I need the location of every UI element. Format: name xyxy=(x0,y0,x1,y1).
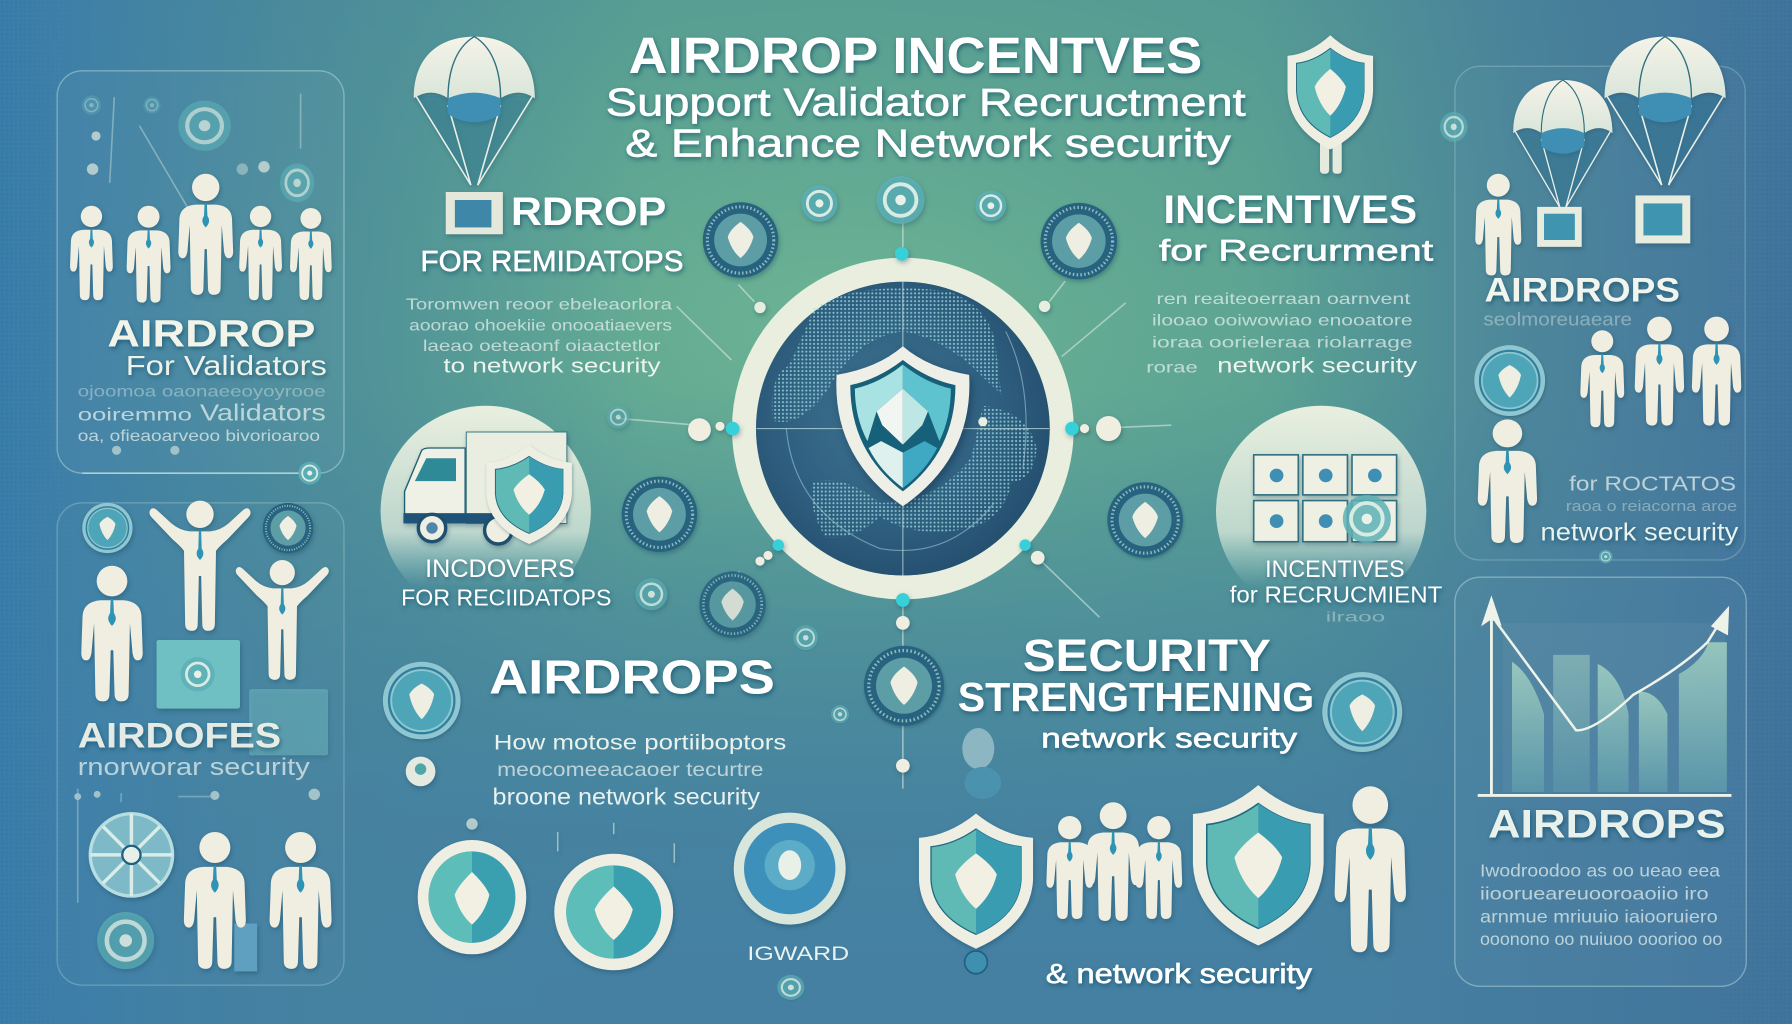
icon: shield badges xyxy=(418,818,674,970)
panel text block: arnmue mriuuio iaiooruiero xyxy=(1480,906,1718,926)
panel text block: oa, ofieaoarveoo bivorioaroo xyxy=(78,428,320,445)
icon: person xyxy=(1475,174,1521,275)
panel text block: Validators xyxy=(200,400,326,426)
central badge xyxy=(864,646,944,726)
icon: token grid xyxy=(1254,455,1397,543)
text block: upper left xyxy=(406,297,672,378)
title: & Enhance Network security xyxy=(625,123,1232,166)
title xyxy=(606,26,1246,166)
panel subheading: For Validators xyxy=(126,350,327,381)
panel text block xyxy=(1541,472,1739,547)
title: Support Validator Recructment xyxy=(606,81,1246,124)
heading: incentives for recruitment: INCENTIVES xyxy=(1163,188,1417,232)
validators group icon xyxy=(70,174,332,303)
text block: airdrops: meocomeeacaoer tecurtre xyxy=(497,759,763,781)
heading: airdrops: AIRDROPS xyxy=(489,652,775,705)
side connector nodes xyxy=(607,406,1121,773)
caption: INCENTIVES xyxy=(1265,556,1405,583)
caption xyxy=(401,555,611,611)
reward label: IGWARD xyxy=(747,943,849,965)
text block: upper right xyxy=(1146,291,1417,378)
icon: parachutes with crates xyxy=(1513,37,1726,247)
network decoration xyxy=(74,789,320,903)
panel footer icon xyxy=(82,446,321,485)
icon: team xyxy=(1046,802,1182,921)
faded glyph xyxy=(962,728,1001,799)
heading: incentives for recruitment xyxy=(1159,188,1434,268)
heading: airdrop for reminders: FOR REMIDATOPS xyxy=(421,246,683,278)
heading: airdrop for reminders: RDROP xyxy=(511,190,666,234)
panel text block: raoa o reiacorna aroe xyxy=(1566,499,1737,515)
panel text block: iioorueareuooroaoiio iro xyxy=(1480,883,1709,903)
heading: security strengthening xyxy=(958,630,1314,753)
title: AIRDROP INCENTVES xyxy=(629,26,1202,84)
trend line with arrow xyxy=(1496,615,1725,730)
lower right badge xyxy=(1107,482,1183,558)
panel text block: ooiremmo xyxy=(78,405,192,425)
heading: security strengthening: network security xyxy=(1041,722,1298,753)
panel: truck icon circle xyxy=(381,406,611,616)
top node badges xyxy=(703,176,1117,313)
icon: truck xyxy=(403,432,567,544)
panel heading: AIRDROPS xyxy=(1485,272,1680,310)
icon: badge xyxy=(1322,672,1402,752)
text block: upper right: network security xyxy=(1217,353,1417,378)
caption: & network security xyxy=(1046,958,1312,989)
panel: airdrop for validators xyxy=(57,71,344,485)
icon: parachute with crate xyxy=(414,37,535,234)
text block: upper right: ilooao ooiwowiao enooatore xyxy=(1152,313,1413,330)
panel: airdrops chart xyxy=(1455,577,1746,986)
caption: INCDOVERS xyxy=(425,555,575,583)
panel text block: network security xyxy=(1541,519,1739,547)
panel text block: ojoomoa oaonaeeoyoyrooe xyxy=(78,384,326,401)
icon: shield xyxy=(486,445,572,544)
central shield xyxy=(836,346,969,506)
badges xyxy=(82,503,313,553)
panel: airdrop network security people xyxy=(57,501,344,985)
panel subheading: seolmoreuaeare xyxy=(1483,309,1632,330)
text block: airdrops: broone network security xyxy=(493,784,761,810)
icon: reward coin xyxy=(734,813,846,925)
icon: large shield xyxy=(1193,785,1324,945)
heading: airdrop for reminders xyxy=(421,190,683,278)
icon: badge xyxy=(383,662,461,739)
panel text block: Iwodroodoo as oo ueao eea xyxy=(1480,861,1721,881)
central globe with shield xyxy=(744,270,1062,587)
axes xyxy=(1478,606,1731,797)
panel heading: AIRDROP xyxy=(107,312,315,354)
panel subheading: rnorworar security xyxy=(78,754,310,781)
panel text block: for ROCTATOS xyxy=(1569,472,1736,495)
heading: incentives for recruitment: for Recrurment xyxy=(1159,235,1434,268)
people icons xyxy=(81,501,329,755)
text block: upper left: to network security xyxy=(443,355,661,378)
icon: shield xyxy=(919,813,1033,949)
icon: title shield xyxy=(1287,35,1373,174)
heading: security strengthening: SECURITY xyxy=(1023,630,1271,681)
wheel icon xyxy=(90,814,173,896)
people icons xyxy=(1478,317,1741,543)
bar chart xyxy=(1478,595,1731,797)
panel: airdrops parachutes and people xyxy=(1440,37,1745,563)
text block: upper right: rorae xyxy=(1146,360,1198,377)
small ring decoration xyxy=(793,625,818,650)
network decoration xyxy=(82,94,314,229)
caption: FOR RECIIDATOPS xyxy=(401,585,611,611)
globe xyxy=(756,281,1050,576)
text block: upper left: laeao oeteaonf oiaactetlor xyxy=(423,338,661,355)
faint note: ilraoo xyxy=(1326,610,1386,625)
network connectors xyxy=(617,211,1171,789)
panel text block xyxy=(78,384,326,445)
people and coin icons xyxy=(97,832,332,971)
text block: airdrops xyxy=(493,730,786,810)
caption: for RECRUCMIENT xyxy=(1230,581,1442,607)
text block: airdrops: How motose portiiboptors xyxy=(494,730,786,755)
panel heading: AIRDROPS xyxy=(1488,803,1726,847)
icon: badge xyxy=(1474,345,1545,416)
small dot xyxy=(965,951,987,974)
panel text block xyxy=(1480,861,1722,949)
panel heading: AIRDOFES xyxy=(78,715,281,755)
panel text block: ooonono oo nuiuoo ooorioo oo xyxy=(1480,929,1722,949)
text block: upper left: Toromwen reoor ebeleaorlora xyxy=(406,297,672,314)
heading: security strengthening: STRENGTHENING xyxy=(958,674,1314,720)
panel: incentives grid circle xyxy=(1216,406,1442,625)
text block: upper right: ren reaiteoerraan oarnvent xyxy=(1157,291,1411,308)
icon: person xyxy=(1335,786,1406,952)
caption xyxy=(1230,556,1442,607)
icon: drop xyxy=(406,757,435,786)
text block: upper right: ioraa oorieleraa riolarrage xyxy=(1152,334,1413,351)
lower left badges xyxy=(622,477,766,638)
text block: upper left: aoorao ohoekiie onooatiaevers xyxy=(409,317,672,334)
icon: reward small coin xyxy=(777,975,805,1000)
